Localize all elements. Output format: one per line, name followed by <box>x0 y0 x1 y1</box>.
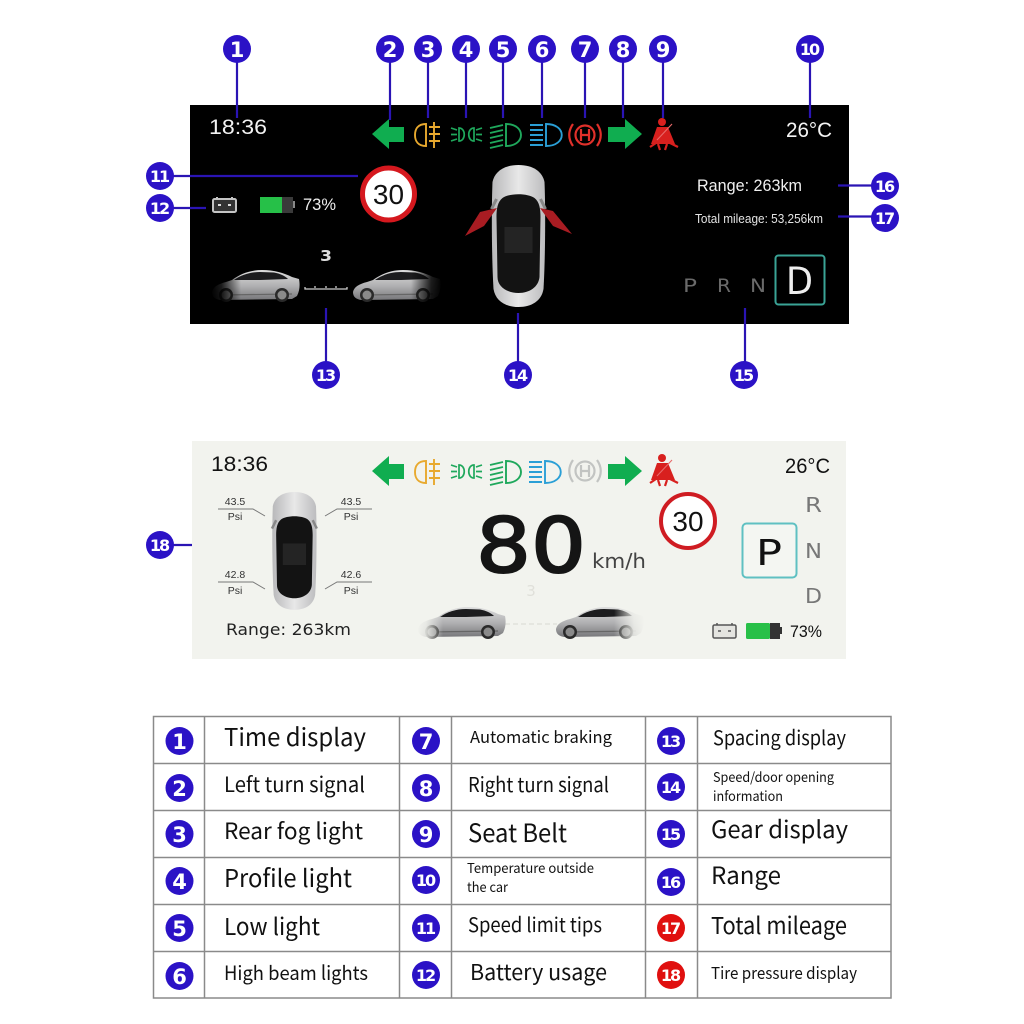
rear left tire: Psi <box>228 585 242 597</box>
legend row 6 middle: 12 <box>416 966 435 985</box>
front right tire: Psi <box>344 511 358 523</box>
speed limit sign <box>362 168 414 220</box>
time: 18:36 <box>209 116 267 139</box>
car with open doors <box>465 165 572 307</box>
front left tire <box>218 496 265 523</box>
legend row 1 right: 13 <box>661 732 680 751</box>
icon: low light <box>490 461 521 485</box>
legend row 1 right: Spacing display <box>713 722 847 751</box>
gear letters: R <box>717 275 731 297</box>
callout numbers: 4 <box>459 38 473 62</box>
callout numbers: 2 <box>383 38 397 62</box>
callout numbers: 5 <box>496 38 510 62</box>
callout numbers: 1 <box>230 38 244 62</box>
legend row 6 left <box>166 957 368 990</box>
icon: automatic braking <box>569 124 601 146</box>
callout numbers: 13 <box>316 366 335 385</box>
table grid <box>153 716 891 998</box>
legend row 1 middle: Automatic braking <box>470 724 613 748</box>
legend table <box>153 716 891 998</box>
left door open <box>465 208 497 236</box>
time: 18:36 <box>211 453 268 476</box>
speed unit: km/h <box>592 549 646 573</box>
callout numbers: 16 <box>875 177 895 196</box>
tire pressure diagram <box>218 492 372 610</box>
icon: high beam <box>530 124 562 146</box>
legend row 6 left: High beam lights <box>224 957 368 986</box>
icon: profile light <box>451 128 482 141</box>
rear right tire <box>325 569 372 597</box>
legend row 4 left <box>166 860 352 895</box>
legend row 1 left: Time display <box>224 719 366 754</box>
legend row 5 middle: Speed limit tips <box>468 909 602 938</box>
icon: battery level <box>260 197 295 213</box>
icon: 12V battery <box>213 197 236 212</box>
legend row 3 left <box>166 814 364 848</box>
gear letters <box>683 275 766 297</box>
legend row 1 left <box>166 719 366 755</box>
callout numbers: 15 <box>734 366 754 385</box>
icon: high beam <box>529 461 561 483</box>
gear letters: N <box>805 539 822 563</box>
car top view <box>272 492 317 610</box>
legend row 2 right <box>657 766 834 805</box>
callout numbers: 14 <box>508 366 528 385</box>
legend row 5 right: 17 <box>661 919 680 938</box>
legend row 2 right: Speed/door opening <box>713 766 834 786</box>
spacing number: 3 <box>320 247 332 265</box>
icon: seat belt <box>650 454 678 486</box>
speed: 80 <box>476 501 586 590</box>
legend row 4 right <box>657 856 781 896</box>
callout numbers: 12 <box>150 199 169 218</box>
active gear D: D <box>786 260 813 303</box>
callout numbers: 6 <box>535 38 549 62</box>
legend row 6 right <box>657 960 857 989</box>
spacing ruler faint <box>505 623 557 625</box>
legend row 2 left <box>166 769 365 802</box>
legend row 2 middle: Right turn signal <box>468 768 609 798</box>
front left tire: Psi <box>228 511 242 523</box>
legend row 3 right: Gear display <box>711 810 848 845</box>
icon: profile light <box>451 465 482 478</box>
front right tire: 43.5 <box>341 496 361 508</box>
battery percent: 73% <box>303 195 336 214</box>
callout numbers: 8 <box>616 38 630 62</box>
legend row 4 middle: the car <box>467 876 509 896</box>
legend row 6 right: 18 <box>661 966 681 985</box>
gear letters: N <box>750 275 766 297</box>
legend row 5 right <box>657 907 847 942</box>
icon: rear fog light <box>415 122 440 148</box>
leader lines <box>172 62 872 545</box>
car: following vehicle <box>556 606 645 642</box>
legend row 2 right: 14 <box>661 778 681 797</box>
legend row 1 middle <box>412 724 613 755</box>
legend row 2 right: information <box>713 785 783 805</box>
gear letters: P <box>683 275 697 297</box>
legend row 3 middle: 9 <box>419 823 433 847</box>
legend row 2 left: Left turn signal <box>224 769 365 799</box>
legend row 6 middle <box>412 955 607 989</box>
callout numbers: 18 <box>150 536 170 555</box>
legend row 3 left: Rear fog light <box>224 814 364 846</box>
speed limit sign: 30 <box>672 506 704 537</box>
active gear P <box>742 524 796 578</box>
legend row 3 middle <box>412 814 568 850</box>
battery percent: 73% <box>790 623 822 641</box>
range: Range: 263km <box>697 176 802 195</box>
legend row 5 left <box>166 908 320 942</box>
front left tire: 43.5 <box>225 496 245 508</box>
legend row 2 left: 2 <box>172 777 187 801</box>
callout numbers: 7 <box>578 38 592 62</box>
total mileage: Total mileage: 53,256km <box>695 212 823 226</box>
panel: light day display <box>192 441 846 659</box>
speed limit sign <box>661 494 715 548</box>
callout numbers <box>146 35 899 559</box>
active gear P: P <box>756 533 782 574</box>
icon: rear fog light <box>415 459 440 485</box>
icon: left turn arrow <box>372 119 404 149</box>
rear right tire: 42.6 <box>341 569 361 581</box>
legend row 2 middle: 8 <box>419 777 433 801</box>
panel: dark night display <box>190 105 849 324</box>
legend row 4 middle: Temperature outside <box>467 857 594 877</box>
legend row 1 left: 1 <box>172 730 187 754</box>
car: lead vehicle <box>211 269 300 305</box>
legend row 6 middle: Battery usage <box>470 955 607 987</box>
temperature: 26°C <box>786 119 832 142</box>
legend row 3 right: 15 <box>661 825 681 844</box>
icon: battery level <box>746 623 782 639</box>
callout numbers: 3 <box>421 38 435 62</box>
rear left tire <box>218 569 265 597</box>
legend row 4 left: 4 <box>172 870 187 894</box>
legend row 4 right: Range <box>711 856 781 891</box>
legend row 6 left: 6 <box>172 965 187 989</box>
legend row 4 middle: 10 <box>416 871 436 890</box>
legend row 5 middle: 11 <box>416 919 436 938</box>
active gear D <box>776 256 824 304</box>
icon: automatic braking inactive <box>569 460 601 482</box>
legend row 4 middle <box>412 857 594 896</box>
legend row 5 left: Low light <box>224 908 320 942</box>
legend row 5 left: 5 <box>172 917 187 941</box>
icon: left turn arrow <box>372 456 404 486</box>
legend row 1 middle: 7 <box>419 730 433 754</box>
legend row 3 left: 3 <box>172 823 187 847</box>
legend row 5 right: Total mileage <box>711 907 847 941</box>
icon: low light <box>490 124 521 148</box>
legend row 3 middle: Seat Belt <box>468 814 568 850</box>
legend row 2 middle <box>412 768 609 802</box>
callout numbers: 9 <box>656 38 670 62</box>
icon: seat belt <box>650 118 678 150</box>
legend row 4 left: Profile light <box>224 860 352 895</box>
car: following vehicle <box>353 269 442 305</box>
legend row 4 right: 16 <box>661 873 681 892</box>
car: lead vehicle <box>417 606 506 642</box>
legend row 3 right <box>657 810 848 848</box>
rear left tire: 42.8 <box>225 569 245 581</box>
speed limit sign: 30 <box>373 179 404 210</box>
icon: 12V battery <box>713 623 736 638</box>
rear right tire: Psi <box>344 585 358 597</box>
gear letters <box>805 493 822 608</box>
gear letters: D <box>805 584 822 608</box>
callout numbers: 11 <box>150 167 170 186</box>
icon: right turn arrow <box>608 119 642 149</box>
temperature: 26°C <box>785 455 830 478</box>
spacing number faint: 3 <box>526 582 536 600</box>
callout numbers: 17 <box>875 209 894 228</box>
callout numbers: 10 <box>800 40 820 59</box>
legend row 1 right <box>657 722 847 755</box>
gear letters: R <box>805 493 822 517</box>
range: Range: 263km <box>226 620 351 639</box>
spacing ruler <box>305 286 347 289</box>
icon: right turn arrow <box>608 456 642 486</box>
front right tire <box>325 496 372 523</box>
legend row 6 right: Tire pressure display <box>711 960 857 984</box>
right door open <box>540 208 572 234</box>
legend row 5 middle <box>412 909 602 942</box>
